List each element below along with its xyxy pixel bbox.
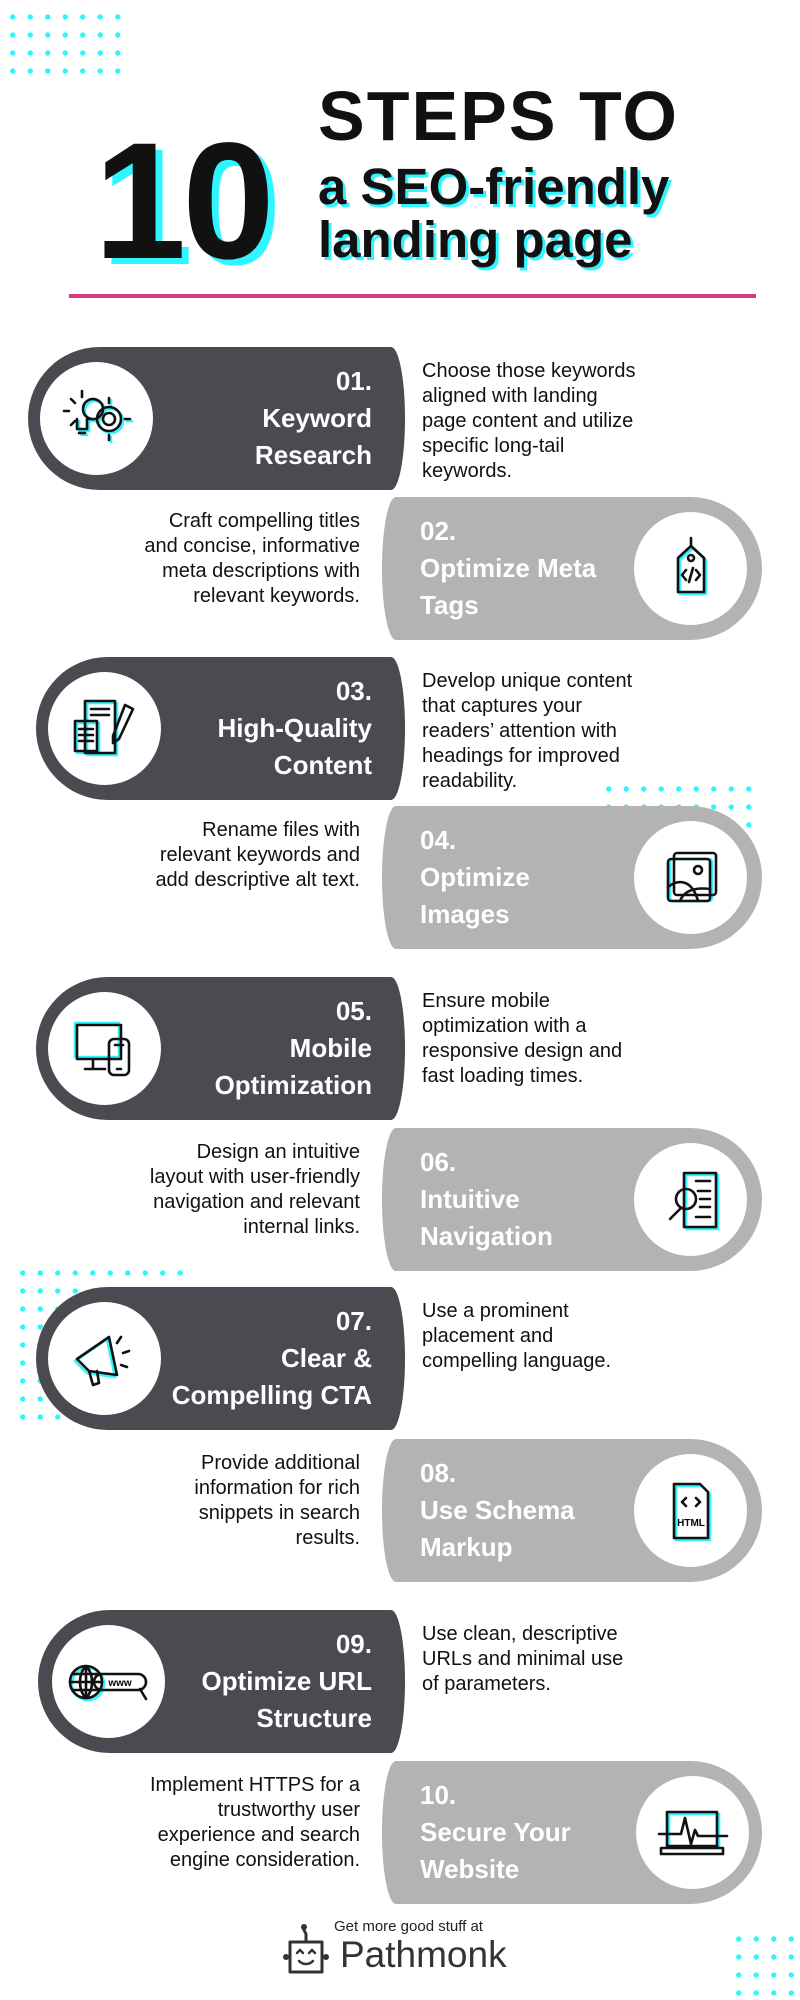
description <box>422 360 635 482</box>
description: meta descriptions with <box>162 560 360 582</box>
description: navigation and relevant <box>153 1191 360 1213</box>
description <box>194 1452 360 1549</box>
description: responsive design and <box>422 1040 622 1062</box>
icon: lightbulb and gear <box>40 362 153 475</box>
description: of parameters. <box>422 1673 551 1695</box>
description: fast loading times. <box>422 1065 583 1087</box>
description: keywords. <box>422 460 512 482</box>
step 09: URL structure <box>38 1610 623 1753</box>
step title: 07. <box>336 1306 372 1336</box>
step title: Images <box>420 899 510 929</box>
description: add descriptive alt text. <box>155 869 360 891</box>
step title: 04. <box>420 825 456 855</box>
description: Design an intuitive <box>197 1141 360 1163</box>
step title: Content <box>274 750 372 780</box>
step title: High-Quality <box>217 713 372 743</box>
footer text: Get more good stuff at <box>334 1918 483 1935</box>
description: and concise, informative <box>144 535 360 557</box>
icon: HTML file <box>634 1454 747 1567</box>
step title <box>202 1629 372 1733</box>
step title: Website <box>420 1854 519 1884</box>
brand name: Pathmonk <box>340 1934 507 1975</box>
step title: Optimize Meta <box>420 553 596 583</box>
step title: 08. <box>420 1458 456 1488</box>
footer: Pathmonk logo <box>283 1918 507 1975</box>
title <box>94 77 679 294</box>
step 05: mobile optimization <box>36 977 622 1120</box>
step 01: keyword research <box>28 347 635 490</box>
title line: STEPS TO: STEPS TO <box>318 77 679 155</box>
icon: tag with code <box>634 512 747 625</box>
step title: Intuitive <box>420 1184 520 1214</box>
description: Develop unique content <box>422 670 632 692</box>
description <box>150 1141 360 1238</box>
step title: 01. <box>336 366 372 396</box>
description <box>422 1623 623 1695</box>
step 02: meta tags <box>144 497 762 640</box>
step title: Mobile <box>290 1033 372 1063</box>
icon: globe with www bar: www <box>107 1678 131 1688</box>
step title: Markup <box>420 1532 512 1562</box>
step title: 09. <box>336 1629 372 1659</box>
step title <box>420 1458 575 1562</box>
description <box>422 1300 611 1372</box>
description <box>144 510 360 607</box>
description: information for rich <box>194 1477 360 1499</box>
description: Provide additional <box>201 1452 360 1474</box>
step title: 02. <box>420 516 456 546</box>
step title <box>420 1147 553 1251</box>
step 07: clear & compelling CTA <box>36 1287 611 1430</box>
step title <box>420 516 596 620</box>
step title <box>420 825 530 929</box>
step title: Structure <box>256 1703 372 1733</box>
description: aligned with landing <box>422 385 598 407</box>
step title <box>172 1306 372 1410</box>
description: results. <box>296 1527 360 1549</box>
icon: robot face <box>283 1924 329 1974</box>
description: placement and <box>422 1325 553 1347</box>
description: Use a prominent <box>422 1300 569 1322</box>
description: compelling language. <box>422 1350 611 1372</box>
step title <box>420 1780 571 1884</box>
step title: Secure Your <box>420 1817 571 1847</box>
step title: Use Schema <box>420 1495 575 1525</box>
title number 10: 10 <box>94 109 271 294</box>
step title: Optimize URL <box>202 1666 372 1696</box>
step title: Compelling CTA <box>172 1380 372 1410</box>
icon: megaphone <box>48 1302 161 1415</box>
description: Craft compelling titles <box>169 510 360 532</box>
description: that captures your <box>422 695 582 717</box>
step title: Research <box>255 440 372 470</box>
description: Implement HTTPS for a <box>150 1774 360 1796</box>
description: relevant keywords and <box>160 844 360 866</box>
step title <box>217 676 372 780</box>
icon: globe with www bar <box>52 1625 165 1738</box>
step 10: secure your website <box>150 1761 762 1904</box>
step 03: high-quality content <box>36 657 632 800</box>
description: layout with user-friendly <box>150 1166 360 1188</box>
icon: laptop with pulse <box>636 1776 749 1889</box>
icon: HTML file: HTML <box>677 1518 704 1528</box>
icon: documents and pen <box>48 672 161 785</box>
description <box>155 819 360 891</box>
title line: landing page: landing page <box>318 211 633 268</box>
description <box>150 1774 360 1871</box>
description: snippets in search <box>199 1502 360 1524</box>
icon: magnifier over document <box>634 1143 747 1256</box>
step title: Optimize <box>420 862 530 892</box>
step title <box>215 996 372 1100</box>
description: readers’ attention with <box>422 720 617 742</box>
step title: 06. <box>420 1147 456 1177</box>
step title: Clear & <box>281 1343 372 1373</box>
description: Choose those keywords <box>422 360 635 382</box>
description: headings for improved <box>422 745 620 767</box>
title line: a SEO-friendly: a SEO-friendly <box>318 158 669 215</box>
description <box>422 990 622 1087</box>
step 04: optimize images <box>155 806 762 949</box>
step title: Navigation <box>420 1221 553 1251</box>
icon: monitor and phone <box>48 992 161 1105</box>
description: page content and utilize <box>422 410 633 432</box>
description: Use clean, descriptive <box>422 1623 618 1645</box>
description: experience and search <box>158 1824 360 1846</box>
step title: Tags <box>420 590 479 620</box>
description: relevant keywords. <box>193 585 360 607</box>
description: optimization with a <box>422 1015 587 1037</box>
step 06: intuitive navigation <box>150 1128 762 1271</box>
step title: 05. <box>336 996 372 1026</box>
description: Rename files with <box>202 819 360 841</box>
step title <box>255 366 372 470</box>
description: Ensure mobile <box>422 990 550 1012</box>
description: readability. <box>422 770 517 792</box>
description: engine consideration. <box>170 1849 360 1871</box>
description: URLs and minimal use <box>422 1648 623 1670</box>
icon: image <box>634 821 747 934</box>
step title: Optimization <box>215 1070 372 1100</box>
description: internal links. <box>243 1216 360 1238</box>
description: specific long-tail <box>422 435 564 457</box>
step title: 10. <box>420 1780 456 1810</box>
description: trustworthy user <box>218 1799 360 1821</box>
description <box>422 670 632 792</box>
step title: Keyword <box>262 403 372 433</box>
step title: 03. <box>336 676 372 706</box>
step 08: schema markup <box>194 1439 762 1582</box>
